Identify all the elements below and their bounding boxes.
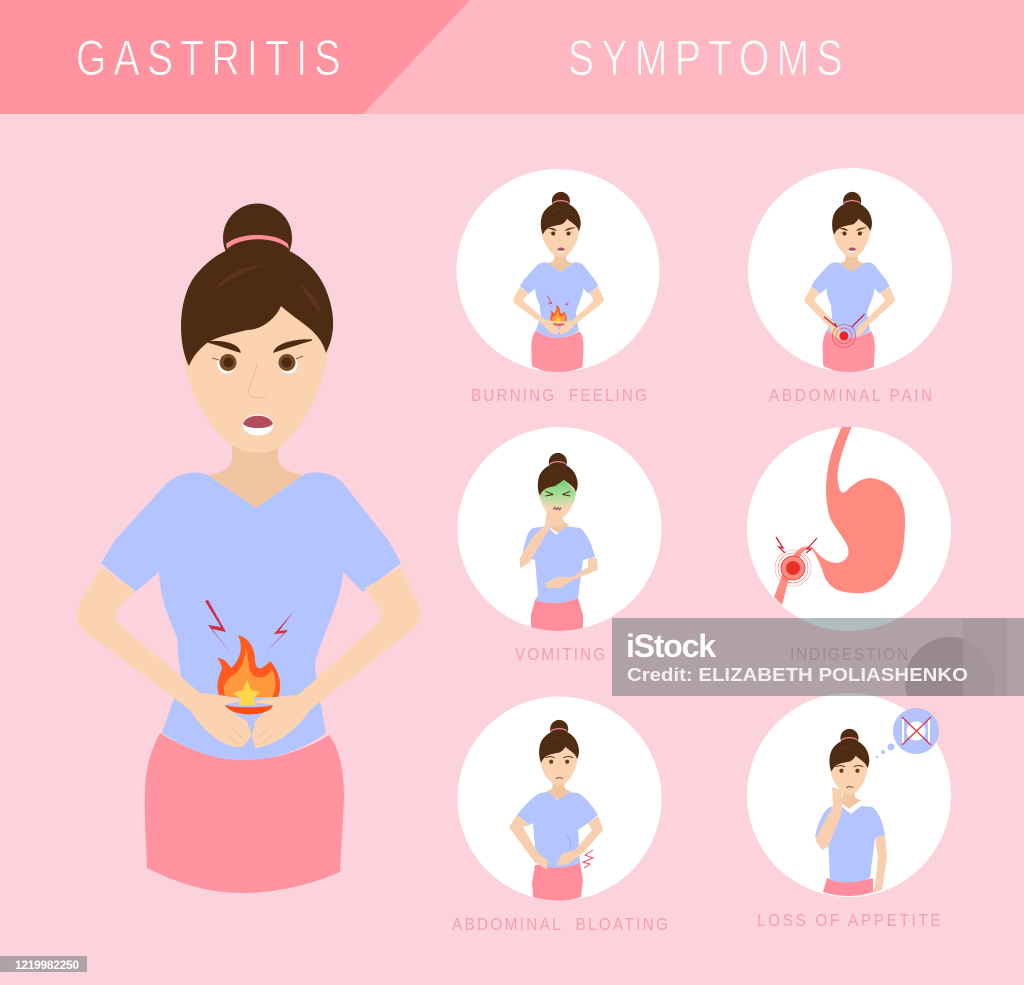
- label: abdominal bloating: ABDOMINAL BLOATING: [452, 914, 668, 934]
- logo: iStock: iStock: [626, 628, 716, 664]
- image id tag: [0, 956, 87, 972]
- watermark band: [612, 618, 1024, 696]
- header band: [0, 0, 1024, 114]
- label: indigestion (behind watermark): INDIGESTION: [790, 644, 908, 664]
- title: gastritis: GASTRITIS: [76, 29, 340, 86]
- icon: stomach: [774, 426, 905, 605]
- label: abdominal pain: ABDOMINAL PAIN: [769, 385, 932, 405]
- panel: abdominal pain: [748, 168, 952, 373]
- main figure: woman with stomach burning: [77, 204, 421, 893]
- label: burning feeling: BURNING FEELING: [471, 385, 647, 405]
- icon: no food thought bubble: [876, 708, 939, 758]
- label: loss of appetite: LOSS OF APPETITE: [757, 910, 941, 930]
- label: vomiting: VOMITING: [515, 644, 605, 664]
- panel: loss of appetite: [747, 693, 951, 897]
- panel: vomiting: [458, 427, 662, 631]
- panel: indigestion stomach: [747, 426, 951, 631]
- image id tag: 1219982250: [15, 958, 79, 972]
- panel: abdominal bloating: [458, 696, 662, 901]
- panel: burning feeling: [456, 169, 660, 373]
- credit line: Credit: ELIZABETH POLIASHENKO: [627, 664, 968, 685]
- title: symptoms: SYMPTOMS: [568, 29, 843, 86]
